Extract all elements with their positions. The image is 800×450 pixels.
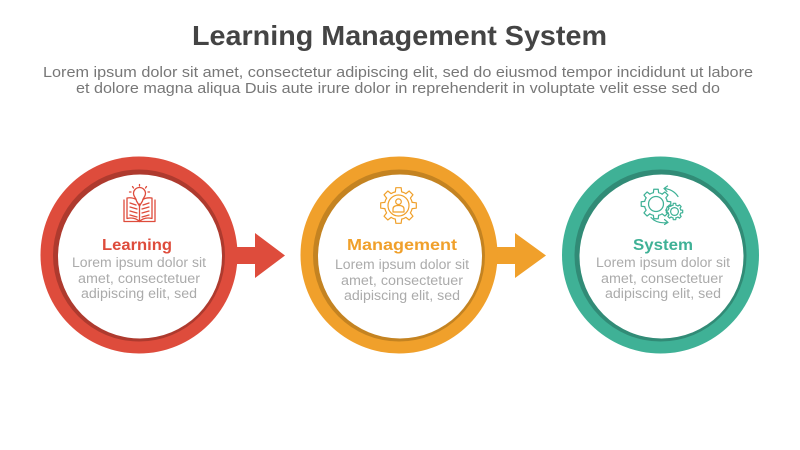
heading: system: System [633,237,693,254]
panel: management [300,156,546,354]
icon part: top cycle arrow [664,186,678,196]
text block: management [335,257,469,303]
text block: system: adipiscing elit, sed [605,286,721,301]
text block: learning: Lorem ipsum dolor sit [72,255,206,270]
icon: book with light bulb [124,184,155,222]
ring: management [300,156,498,354]
text block: management: Lorem ipsum dolor sit [335,257,469,272]
subtitle text [43,64,753,97]
text block: learning [72,255,206,301]
text block: learning: amet, consectetuer [78,271,201,286]
text block: system: amet, consectetuer [601,271,724,286]
subtitle text: et dolore magna aliqua Duis aute irure dolor in reprehenderit in voluptate velit esse sed do [76,80,720,97]
text block: management: adipiscing elit, sed [344,288,460,303]
arrow: management to system [490,233,546,278]
icon: gears with cycle arrows [641,186,683,224]
heading: management: Management [347,237,458,254]
text block: system: Lorem ipsum dolor sit [596,255,730,270]
arrow: learning to management [230,233,285,278]
icon part: large gear [641,189,671,219]
ring: system [562,156,759,354]
ring: learning [40,156,238,354]
text block: management: amet, consectetuer [341,273,464,288]
text block: learning: adipiscing elit, sed [81,286,197,301]
subtitle text: Lorem ipsum dolor sit amet, consectetur adipiscing elit, sed do eiusmod tempor incididunt ut labore [43,64,753,81]
title: Learning Management System [192,20,607,51]
icon part: bottom cycle arrow [651,218,668,224]
panel: system [562,156,759,354]
panel: learning [40,156,285,354]
icon part: small gear [666,203,683,220]
icon: gear with person [381,188,416,223]
heading: learning: Learning [102,237,172,254]
text block: system [596,255,730,301]
